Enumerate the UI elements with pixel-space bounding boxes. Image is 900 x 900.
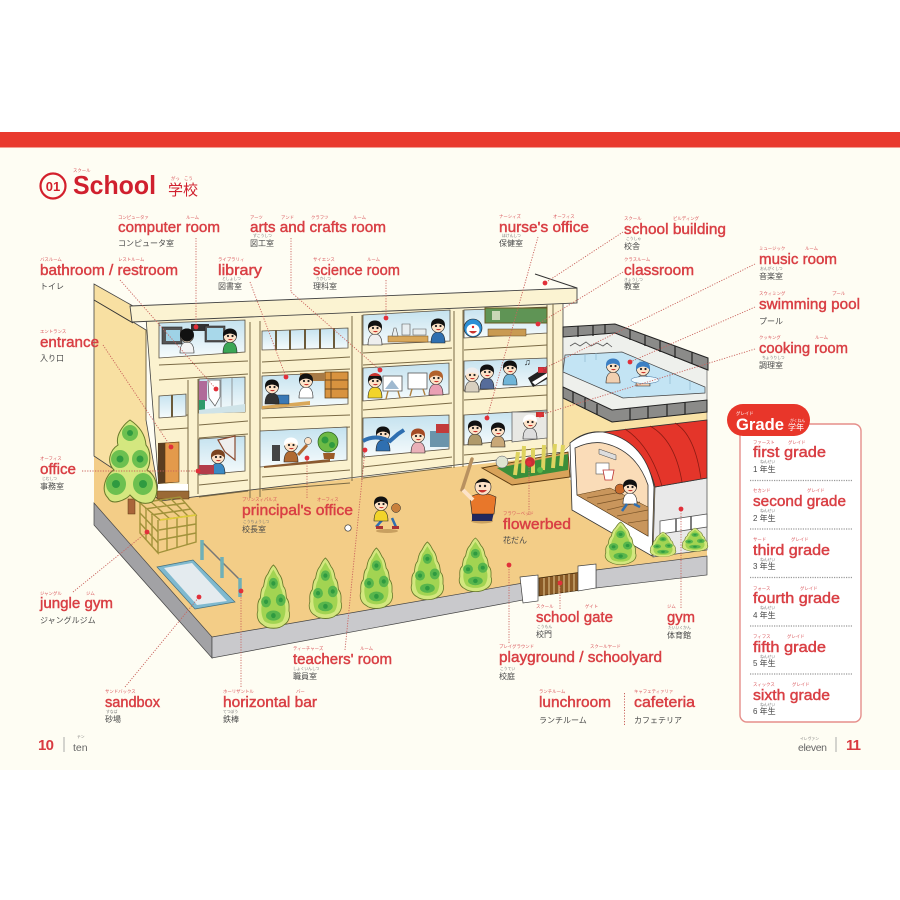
label: teachers' room: ティーチャーズ <box>293 645 324 652</box>
label: gym: ジム <box>667 604 676 609</box>
science room window <box>363 310 450 345</box>
label: entrance: entrance <box>40 334 99 351</box>
label: playground / schoolyard: 校庭 <box>499 671 515 681</box>
label: entrance <box>40 329 99 363</box>
music room window <box>464 357 547 392</box>
label: swimming pool: スウィミング <box>759 290 786 297</box>
label: arts and crafts room: クラフツ <box>311 215 329 221</box>
second grade: グレイド <box>807 487 825 494</box>
entrance door <box>157 442 189 499</box>
page number: left: ten <box>73 742 88 754</box>
label: nurse's office: オーフィス <box>553 214 575 219</box>
illustration: school <box>94 274 708 658</box>
label: arts and crafts room: 図工室 <box>250 238 274 248</box>
page number: right: イレヴァン <box>800 736 819 741</box>
label: office: じむしつ <box>42 476 57 481</box>
label: bathroom / restroom: レストルーム <box>118 257 145 262</box>
label: jungle gym <box>39 590 113 625</box>
label: flowerbed: flowerbed <box>503 516 571 533</box>
roof <box>130 288 577 322</box>
front face <box>570 432 654 556</box>
label: entrance: 入り口 <box>40 354 64 363</box>
label: arts and crafts room <box>250 215 386 248</box>
yard ground <box>94 455 707 638</box>
fourth grade: 4 年生 <box>753 610 776 620</box>
label: school gate: school gate <box>536 609 613 626</box>
label: arts and crafts room: アンド <box>281 215 294 221</box>
label: sandbox: サンドバックス <box>105 689 136 695</box>
label: cooking room: ルーム <box>815 335 829 340</box>
label: school building: こうしゃ <box>626 236 641 241</box>
swimmers <box>606 358 620 383</box>
label: jungle gym: ジム <box>86 591 95 596</box>
icon: music notes: ♫ <box>524 357 531 367</box>
sixth grade: グレイド <box>792 681 810 688</box>
grade tab: がくねん <box>790 418 805 423</box>
fourth grade: ねんせい <box>760 605 775 610</box>
second grade <box>753 487 846 523</box>
leader lines and dots <box>73 232 755 687</box>
fourth grade: グレイド <box>800 585 818 592</box>
label: computer room <box>118 214 220 248</box>
label: computer room: ルーム <box>186 215 200 220</box>
label: classroom: クラスルーム <box>624 257 651 263</box>
icon: blue robot cat <box>464 319 482 337</box>
label: horizontal bar: horizontal bar <box>223 694 317 711</box>
label: cooking room: 調理室 <box>759 360 783 370</box>
label: lunchroom: lunchroom <box>539 694 611 711</box>
fifth grade <box>753 633 826 668</box>
panel: grade <box>727 404 861 722</box>
label: playground / schoolyard: プレイグラウンド <box>499 643 534 650</box>
page number: right: 11 <box>846 737 861 754</box>
label: school gate: こうもん <box>537 624 552 629</box>
label: classroom: 教室 <box>624 281 640 291</box>
label: jungle gym: ジャングル <box>40 590 62 597</box>
label: lunchroom <box>539 689 611 725</box>
third grade: 3 年生 <box>753 561 776 571</box>
upper window row: arts corridor <box>262 328 348 350</box>
label: bathroom / restroom: トイレ <box>40 282 64 291</box>
sixth grade: ねんせい <box>760 702 775 707</box>
nurse's office window <box>464 307 547 338</box>
label: teachers' room: ルーム <box>360 646 374 651</box>
label: arts and crafts room: ずこうしつ <box>253 233 272 238</box>
label: science room <box>313 257 400 291</box>
label: principal's office: プリンスィパルズ <box>242 496 278 503</box>
fifth grade: ねんせい <box>760 654 775 659</box>
label: arts and crafts room: アーツ <box>250 215 263 221</box>
label: music room: 音楽室 <box>759 271 783 281</box>
wall beneath pool <box>563 396 707 452</box>
label: playground / schoolyard <box>499 643 662 681</box>
label: principal's office <box>242 496 353 534</box>
label: principal's office: こうちょうしつ <box>243 519 270 524</box>
second grade: ねんせい <box>760 508 775 513</box>
label: school gate: 校門 <box>536 629 552 639</box>
label: entrance: エントランス <box>40 329 66 335</box>
title: こう <box>184 176 193 182</box>
label: swimming pool: swimming pool <box>759 296 860 313</box>
swimming pool <box>563 324 708 422</box>
big boy with bat <box>462 459 496 524</box>
label: flowerbed: 花だん <box>503 535 527 545</box>
label: principal's office: principal's office <box>242 502 353 519</box>
label: school building: ビルディング <box>673 215 700 222</box>
label: school building: school building <box>624 221 726 238</box>
label: science room: サイエンス <box>313 257 335 263</box>
label: horizontal bar: バー <box>296 689 305 694</box>
label: classroom <box>624 257 694 291</box>
label: nurse's office <box>499 213 589 248</box>
label: cafeteria: キャフェティァリァ <box>634 689 673 695</box>
big tree <box>104 420 157 514</box>
horizontal bar <box>202 540 240 597</box>
label: library: ライブラリィ <box>218 256 244 263</box>
label: arts and crafts room: ルーム <box>353 215 367 220</box>
label: science room: ルーム <box>367 257 381 262</box>
label: music room: ルーム <box>805 246 819 251</box>
first grade: グレイド <box>788 439 806 446</box>
label: library <box>218 256 263 291</box>
first grade: ねんせい <box>760 459 775 464</box>
front trees <box>257 522 708 628</box>
label: science room: science room <box>313 262 400 279</box>
fifth grade: fifth grade <box>753 639 826 656</box>
label: cafeteria: cafeteria <box>634 694 696 711</box>
third grade: ねんせい <box>760 557 775 562</box>
page number: left <box>38 734 88 754</box>
label: gym: たいいくかん <box>668 625 691 630</box>
label: teachers' room: 職員室 <box>293 671 317 681</box>
yard outer wall <box>94 503 707 658</box>
arts and crafts room window <box>363 363 449 401</box>
label: cooking room: クッキング <box>759 334 781 341</box>
sixth grade: sixth grade <box>753 687 830 704</box>
grade tab: Grade <box>736 415 784 434</box>
small ball <box>345 525 351 531</box>
label: principal's office: オーフィス <box>317 497 339 502</box>
label: gym: gym <box>667 609 695 626</box>
label: cooking room: ちょうりしつ <box>762 355 785 360</box>
first grade: ファースト <box>753 440 775 446</box>
label: horizontal bar: ホーリザントル <box>223 689 254 695</box>
label: gym <box>667 604 695 640</box>
label: teachers' room <box>293 645 392 681</box>
label: lunchroom: ランチルーム <box>539 689 566 695</box>
label: playground / schoolyard: playground / schoolyard <box>499 649 662 666</box>
label: school gate: スクール <box>536 604 554 610</box>
title: がっ <box>171 175 180 182</box>
balcony lines <box>159 345 547 497</box>
fourth grade: fourth grade <box>753 590 840 607</box>
school building front <box>130 274 577 501</box>
side wall <box>653 478 707 557</box>
fourth grade: フォース <box>753 586 770 591</box>
label: school building: 校舎 <box>624 241 640 251</box>
label: computer room: コンピュータ室 <box>118 238 174 248</box>
label: bathroom / restroom: バスルーム <box>40 257 62 262</box>
title: School <box>73 170 156 200</box>
label: computer room: computer room <box>118 219 220 236</box>
title: 学校 <box>168 182 198 199</box>
fourth grade <box>753 585 840 620</box>
label: cafeteria <box>634 689 696 725</box>
library window <box>262 372 348 409</box>
third grade: third grade <box>753 542 830 559</box>
label: sandbox: sandbox <box>105 694 160 711</box>
label: library: library <box>218 262 263 279</box>
label: flowerbed <box>503 511 571 545</box>
principal's office window <box>260 427 347 468</box>
label: swimming pool: プール <box>832 291 846 297</box>
label: principal's office: 校長室 <box>242 524 266 534</box>
label: flowerbed: フラワーベッド <box>503 511 534 517</box>
page number: left: 10 <box>38 737 54 754</box>
label: lunchroom: ランチルーム <box>539 716 587 725</box>
label: nurse's office: nurse's office <box>499 219 589 236</box>
school gate <box>520 564 596 603</box>
label: school building <box>624 215 726 251</box>
label: arts and crafts room: arts and crafts room <box>250 219 386 236</box>
flowerbed <box>482 444 570 485</box>
page number: right <box>798 736 861 754</box>
label: music room: ミュージック <box>759 246 785 252</box>
fifth grade: グレイド <box>787 633 805 640</box>
label: playground / schoolyard: こうてい <box>500 666 515 671</box>
computer room window <box>159 320 245 358</box>
label: sandbox: すなば <box>106 709 118 714</box>
label: school gate <box>536 603 613 639</box>
label: bathroom / restroom <box>40 257 178 291</box>
title: 01 <box>46 179 60 194</box>
label: library: としょしつ <box>222 276 241 281</box>
label: classroom: きょうしつ <box>624 277 643 282</box>
label: swimming pool: プール <box>759 317 783 326</box>
fifth grade: 5 年生 <box>753 658 776 668</box>
first grade: first grade <box>753 444 826 461</box>
teachers' room window <box>363 415 449 457</box>
jungle gym <box>140 497 196 553</box>
page background <box>0 147 900 770</box>
label: cooking room: cooking room <box>759 340 848 357</box>
label: music room <box>759 246 837 281</box>
label: school gate: ゲイト <box>585 603 598 610</box>
page number: left: テン <box>77 734 85 739</box>
label: horizontal bar: てつぼう <box>223 709 238 714</box>
opening <box>575 443 648 536</box>
sixth grade <box>753 681 830 716</box>
roof <box>570 420 707 487</box>
sixth grade: スィックス <box>753 682 775 688</box>
gym <box>570 420 707 557</box>
third grade: グレイド <box>791 536 809 543</box>
label: gym: 体育館 <box>667 630 691 640</box>
label: teachers' room: しょくいんしつ <box>293 666 320 671</box>
third grade: サード <box>753 537 766 543</box>
stair window with girl <box>199 436 245 475</box>
label: computer room: コンピュータァ <box>118 214 149 221</box>
label: library: 図書室 <box>218 281 242 291</box>
back fence <box>563 324 708 370</box>
label: swimming pool <box>759 290 860 326</box>
grade tab <box>727 404 810 436</box>
label: sandbox <box>105 689 160 724</box>
label: teachers' room: teachers' room <box>293 651 392 668</box>
label: science room: 理科室 <box>313 281 337 291</box>
pillars <box>146 304 553 498</box>
label: classroom: classroom <box>624 262 694 279</box>
label: horizontal bar <box>223 689 317 724</box>
label: cooking room <box>759 334 848 370</box>
grade tab: グレイド <box>736 410 754 417</box>
boy running <box>374 496 400 533</box>
page number: right: eleven <box>798 742 827 754</box>
front fence <box>563 387 707 422</box>
top red band <box>0 132 900 148</box>
label: sandbox: 砂場 <box>105 714 121 724</box>
grade tab: 学年 <box>788 422 804 432</box>
second grade: 2 年生 <box>753 513 776 523</box>
label: nurse's office: ほけんしつ <box>502 233 521 238</box>
label: office <box>40 456 76 491</box>
label: nurse's office: 保健室 <box>499 238 523 248</box>
label: cafeteria: カフェテリア <box>634 716 682 725</box>
fifth grade: フィフス <box>753 634 770 639</box>
label: school building: スクール <box>624 216 642 222</box>
classroom window <box>464 410 547 447</box>
label: office: 事務室 <box>40 481 64 491</box>
title <box>40 168 198 200</box>
school building side wall <box>94 284 160 500</box>
label: playground / schoolyard: スクールヤード <box>590 644 621 650</box>
label: office: office <box>40 461 76 478</box>
first grade <box>753 439 826 474</box>
label: horizontal bar: 鉄棒 <box>223 714 239 724</box>
label: music room: music room <box>759 251 837 268</box>
label: music room: おんがくしつ <box>760 266 783 271</box>
sixth grade: 6 年生 <box>753 706 776 716</box>
second grade: セカンド <box>753 488 771 494</box>
label: jungle gym: ジャングルジム <box>40 615 96 625</box>
label: science room: りかしつ <box>316 276 331 281</box>
label: jungle gym: jungle gym <box>39 595 113 612</box>
label: nurse's office: ナーシィズ <box>499 213 521 220</box>
low left window <box>159 394 186 418</box>
first grade: 1 年生 <box>753 464 776 474</box>
second grade: second grade <box>753 493 846 510</box>
title: スクール <box>73 168 91 174</box>
label: bathroom / restroom: bathroom / restroom <box>40 262 178 279</box>
label: office: オーフィス <box>40 456 62 461</box>
bathroom window <box>199 377 245 414</box>
third grade <box>753 536 830 571</box>
sandbox <box>157 560 235 609</box>
